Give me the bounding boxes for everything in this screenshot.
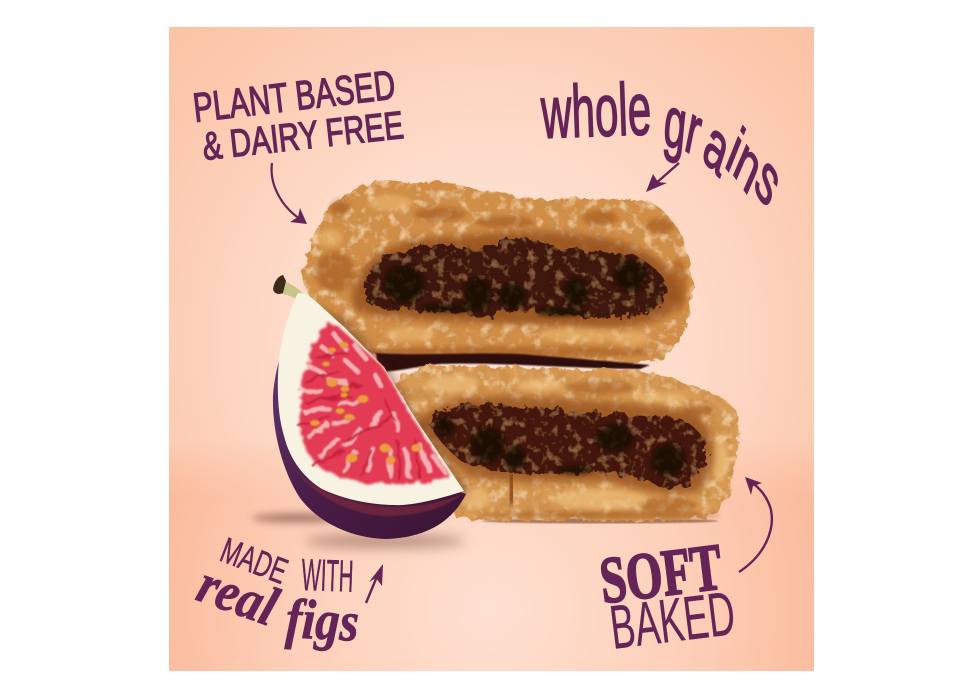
fig rim shading <box>286 455 464 516</box>
dough of top bar <box>303 181 692 365</box>
infographic: fig bar product poster <box>169 27 814 671</box>
fig pulp strands <box>298 335 445 480</box>
label: plant based and dairy free <box>191 62 406 169</box>
label: soft baked <box>596 531 739 663</box>
fig skin <box>273 340 466 539</box>
heading line: plant based: PLANT BASED <box>191 62 398 131</box>
fig red pulp <box>300 322 450 484</box>
fig filling of top bar <box>364 238 666 318</box>
fig filling of bottom bar <box>428 403 708 487</box>
word: made: MADE <box>215 529 293 592</box>
caramel halo around top filling <box>352 231 682 327</box>
arrow: to whole grains cookie <box>646 163 679 192</box>
light crumbs on top bar <box>318 195 650 345</box>
word: grains: grains <box>661 81 790 222</box>
heading line: dairy free: & DAIRY FREE <box>200 104 406 169</box>
gap between the two bars <box>376 353 650 372</box>
crust shading on top bar <box>315 200 687 358</box>
cookie: top bar <box>303 181 692 365</box>
label: made with real figs <box>190 529 360 654</box>
fig shadow on cookie <box>300 300 470 520</box>
panel: peach background <box>169 27 814 671</box>
dark fig pockets of top bar <box>384 261 646 316</box>
arrow: to real figs <box>366 564 383 603</box>
arrow: to plant based cookie <box>272 163 307 224</box>
fig seeds <box>310 342 420 464</box>
label: made with real figs: WITH <box>301 549 354 602</box>
word: whole: whole <box>539 67 652 154</box>
dough of bottom bar <box>395 365 739 521</box>
fig white flesh <box>278 293 464 505</box>
word: figs: figs <box>284 588 360 654</box>
arrow: to soft baked cookie <box>739 477 772 572</box>
light crumbs on bottom bar <box>426 375 728 509</box>
label: whole grains <box>539 67 790 222</box>
word: real: real <box>190 553 286 639</box>
dark fig pockets of bottom bar <box>436 416 685 476</box>
fig stem <box>273 275 286 294</box>
caramel streak in bottom bar <box>510 474 513 504</box>
word: soft: SOFT <box>596 531 726 618</box>
fig stem neck <box>280 280 306 300</box>
caramel halo around bottom filling <box>416 396 714 494</box>
crust shading on bottom bar <box>480 381 720 519</box>
icon: fig wedge <box>273 275 470 539</box>
shadow under cookies and fig <box>252 513 718 548</box>
word: baked: BAKED <box>606 579 739 663</box>
cookie: bottom bar <box>395 365 739 521</box>
